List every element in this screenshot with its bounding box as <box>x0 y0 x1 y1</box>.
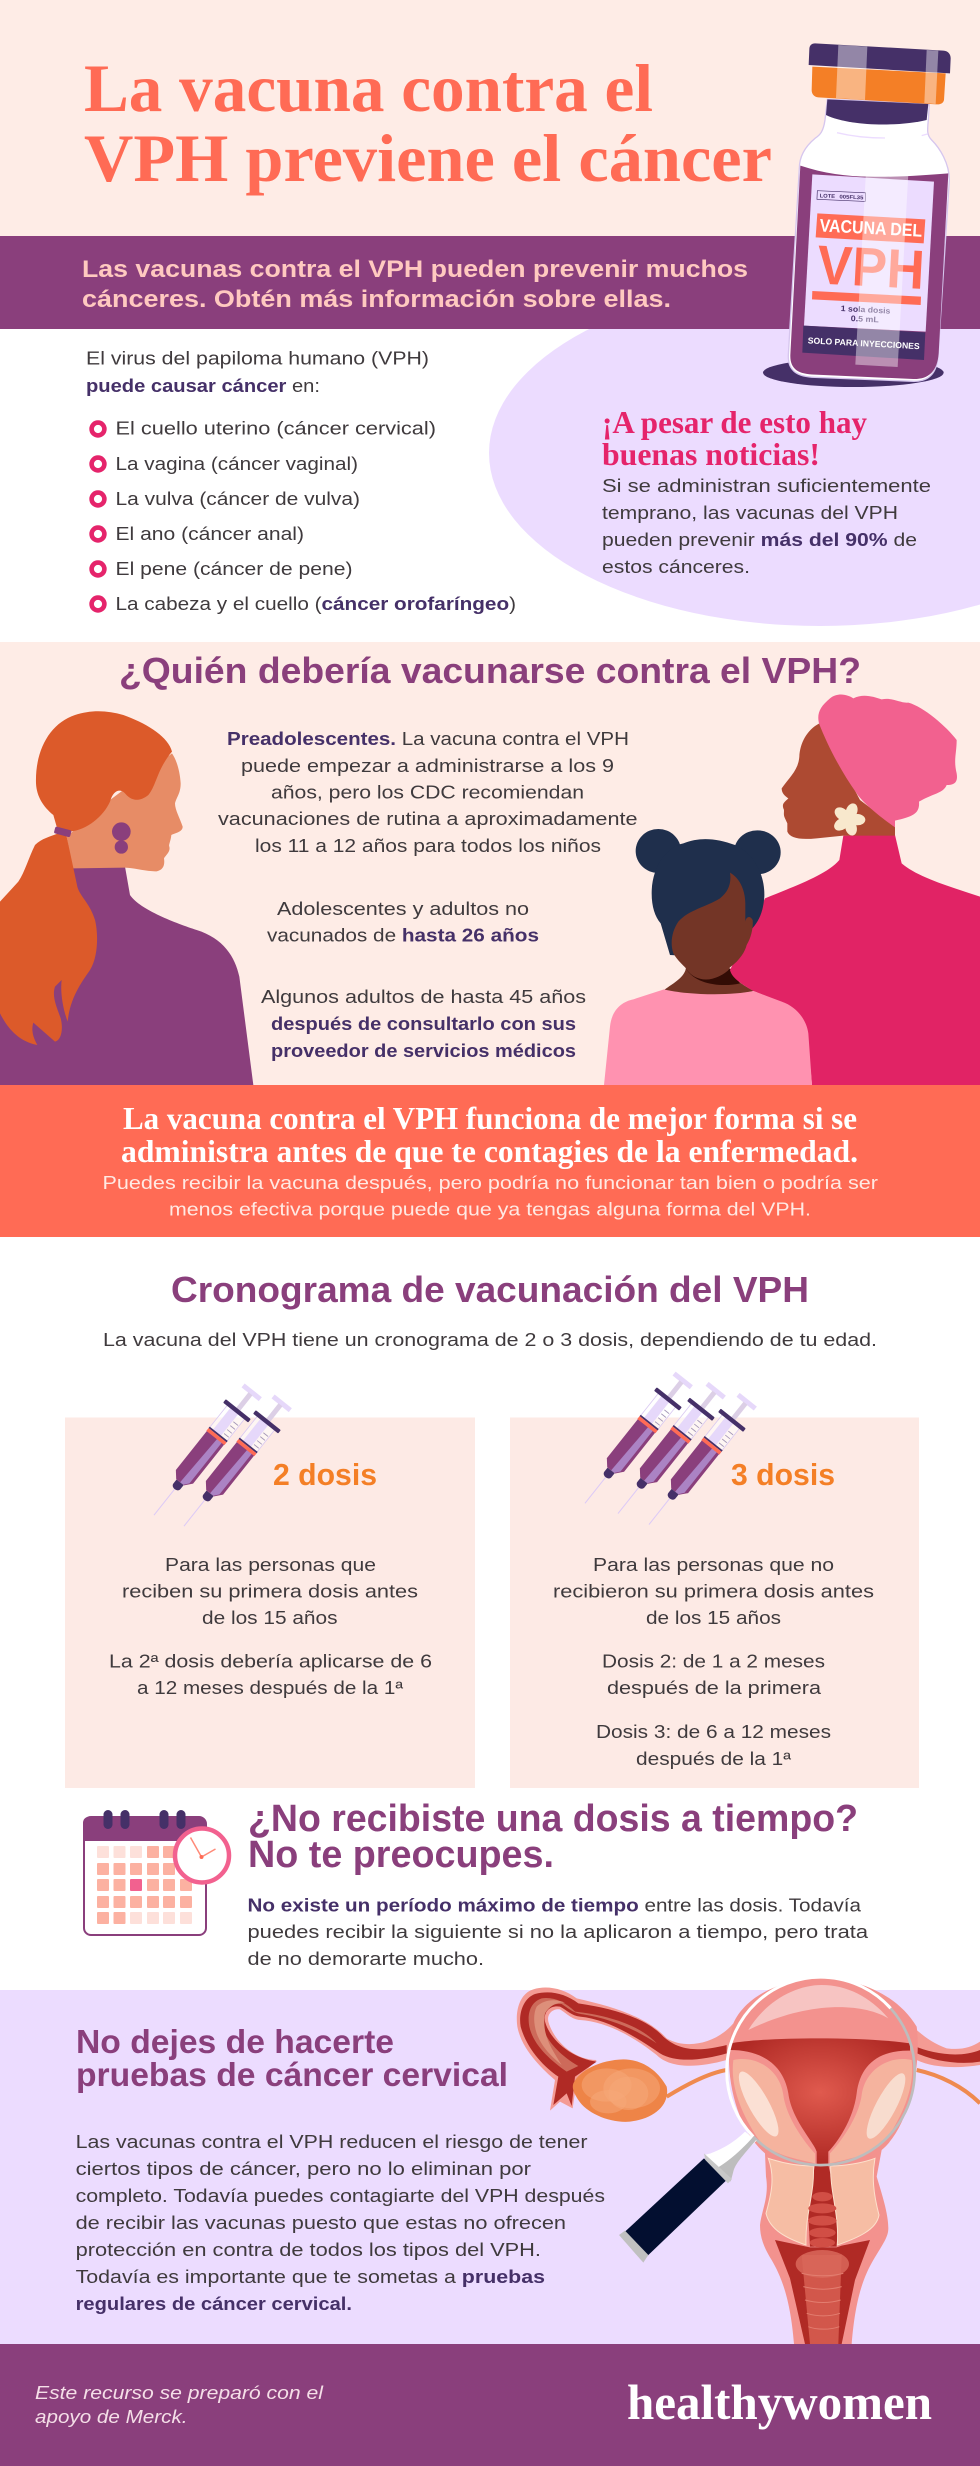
icon: vaccine vial: LOTE <box>820 193 836 200</box>
text block: adults to 45: Algunos adultos de hasta 45 años <box>261 987 586 1007</box>
text block: 2 doses: a 12 meses después de la 1ª <box>137 1678 403 1698</box>
text block: preteens: puede empezar a administrarse a los 9 <box>241 756 614 776</box>
text block: adults to 45: después de consultarlo con sus <box>271 1014 576 1034</box>
text block: works best: Puedes recibir la vacuna después, pero podría no funcionar tan bien o podría ser <box>102 1173 878 1193</box>
text block: 2 doses <box>109 1555 432 1698</box>
panel: coral band <box>0 1085 980 1237</box>
text block: teens and adults: vacunados de hasta 26 años <box>267 926 539 946</box>
intro band text: cánceres. Obtén más información sobre ellas. <box>82 286 671 313</box>
text block: 3 doses: después de la 1ª <box>636 1749 791 1769</box>
text block: missed dose: No existe un período máximo de tiempo entre las dosis. Todavía <box>248 1896 862 1916</box>
text block: screening: protección en contra de todos los tipos del VPH. <box>76 2240 541 2260</box>
text block: preteens: años, pero los CDC recomiendan <box>271 782 584 802</box>
callout: good news: estos cánceres. <box>602 557 750 577</box>
text block: preteens: vacunaciones de rutina a aproximadamente <box>218 809 638 829</box>
panel: purple intro band <box>0 236 980 329</box>
text block: 3 doses <box>553 1555 874 1769</box>
text block: 3 doses: Dosis 3: de 6 a 12 meses <box>596 1722 831 1742</box>
list: cancers: El cuello uterino (cáncer cervical) <box>116 419 436 439</box>
text block: virus causes cancer <box>86 348 429 396</box>
heading: missed dose: ¿No recibiste una dosis a tiempo? <box>248 1798 858 1840</box>
icon: vaccine vial <box>763 43 951 387</box>
illustration: uterus under magnifier <box>517 1977 980 2344</box>
text block: 2 doses: Para las personas que <box>165 1555 376 1575</box>
panel: lilac ellipse <box>489 280 980 626</box>
intro band text <box>82 256 748 313</box>
text block: missed dose: de no demorarte mucho. <box>248 1949 484 1969</box>
heading: who: ¿Quién debería vacunarse contra el VPH? <box>119 650 861 691</box>
callout: good news: temprano, las vacunas del VPH <box>602 503 898 523</box>
text block: adults to 45 <box>261 987 586 1061</box>
icon: vaccine vial: VPH <box>816 233 926 301</box>
text block: screening: de recibir las vacunas puesto que estas no ofrecen <box>76 2213 566 2233</box>
text block: 2 doses: reciben su primera dosis antes <box>122 1582 418 1602</box>
callout: good news <box>602 404 931 577</box>
icon: two syringes <box>141 1380 296 1536</box>
text block: sponsor note <box>35 2383 324 2427</box>
text block: 3 doses: Dosis 2: de 1 a 2 meses <box>602 1652 825 1672</box>
text block: screening: regulares de cáncer cervical. <box>76 2294 352 2314</box>
panel: who should get vaccinated <box>0 642 980 1086</box>
text block: sponsor note: apoyo de Merck. <box>35 2407 188 2427</box>
list: cancers: La cabeza y el cuello ( cáncer orofaríngeo ) <box>116 594 516 614</box>
list: cancers: El ano (cáncer anal) <box>116 524 304 544</box>
heading: screening: No dejes de hacerte <box>76 2023 394 2060</box>
callout: good news: Si se administran suficientemente <box>602 476 931 496</box>
heading: missed dose: No te preocupes. <box>248 1834 554 1876</box>
illustration: woman with ponytail <box>0 711 253 1085</box>
title: VPH previene el cáncer <box>84 120 772 196</box>
list: cancers: El pene (cáncer de pene) <box>116 559 352 579</box>
heading: schedule: Cronograma de vacunación del VPH <box>171 1269 809 1310</box>
callout: good news: ¡A pesar de esto hay <box>602 404 867 440</box>
text block: 3 doses: después de la primera <box>607 1678 822 1698</box>
logo: healthywomen: healthywomen <box>627 2374 932 2430</box>
text block: screening: completo. Todavía puedes contagiarte del VPH después <box>76 2186 605 2206</box>
text block: screening <box>76 2132 605 2314</box>
icon: vaccine vial: 005FL35 <box>839 194 864 201</box>
text block: teens and adults: Adolescentes y adultos no <box>277 899 529 919</box>
label: 2 dosis: 2 dosis <box>273 1457 377 1492</box>
title: La vacuna contra el <box>84 50 653 126</box>
callout: good news: pueden prevenir más del 90% de <box>602 530 917 550</box>
intro band text: Las vacunas contra el VPH pueden prevenir muchos <box>82 256 748 283</box>
text block: 2 doses: de los 15 años <box>202 1608 338 1628</box>
text block: screening: Las vacunas contra el VPH reducen el riesgo de tener <box>76 2132 587 2152</box>
list: cancers: La vagina (cáncer vaginal) <box>116 454 358 474</box>
panel: footer <box>0 2344 980 2466</box>
icon: vaccine vial: VACUNA DEL <box>819 215 923 241</box>
text block: works best <box>102 1100 878 1220</box>
text block: preteens <box>218 729 638 856</box>
text block: works best: La vacuna contra el VPH funciona de mejor forma si se <box>123 1100 857 1136</box>
text block: sponsor note: Este recurso se preparó con el <box>35 2383 324 2403</box>
text block: works best: menos efectiva porque puede que ya tengas alguna forma del VPH. <box>169 1200 811 1220</box>
text block: 3 doses: Para las personas que no <box>593 1555 834 1575</box>
text block: virus causes cancer: El virus del papiloma humano (VPH) <box>86 348 429 368</box>
text block: 3 doses: recibieron su primera dosis antes <box>553 1582 874 1602</box>
heading: screening <box>76 2023 508 2093</box>
title <box>84 50 772 196</box>
icon: calendar with clock <box>83 1810 229 1935</box>
text block: 2 doses: La 2ª dosis debería aplicarse de 6 <box>109 1652 432 1672</box>
panel: cervical screening <box>0 1990 980 2344</box>
text block: 3 doses: de los 15 años <box>646 1608 781 1628</box>
icon: vaccine vial: 1 sola dosis <box>841 304 891 316</box>
illustration: woman with turban and girl with buns <box>604 694 980 1085</box>
text block: preteens: Preadolescentes. La vacuna contra el VPH <box>227 729 629 749</box>
text block: screening: ciertos tipos de cáncer, pero no lo eliminan por <box>76 2159 531 2179</box>
heading: missed dose <box>248 1798 858 1876</box>
heading: screening: pruebas de cáncer cervical <box>76 2056 508 2093</box>
text block: virus causes cancer: puede causar cáncer en: <box>86 376 320 396</box>
text block: schedule intro: La vacuna del VPH tiene un cronograma de 2 o 3 dosis, dependiendo de tu edad. <box>103 1330 877 1350</box>
panel: 3 doses <box>510 1418 919 1788</box>
panel: 2 doses <box>65 1418 475 1788</box>
text block: works best: administra antes de que te contagies de la enfermedad. <box>121 1133 858 1169</box>
text block: preteens: los 11 a 12 años para todos los niños <box>255 836 601 856</box>
text block: screening: Todavía es importante que te sometas a pruebas <box>76 2267 545 2287</box>
panel: header background <box>0 0 980 236</box>
text block: missed dose: puedes recibir la siguiente si no la aplicaron a tiempo, pero trata <box>248 1922 869 1942</box>
text block: teens and adults <box>267 899 539 946</box>
icon: three syringes <box>572 1368 761 1535</box>
callout: good news: buenas noticias! <box>602 436 820 472</box>
icon: vaccine vial: 0.5 mL <box>851 314 879 324</box>
list: cancers <box>92 419 516 614</box>
icon: vaccine vial: SOLO PARA INYECCIONES <box>808 335 920 351</box>
text block: missed dose <box>248 1896 869 1969</box>
label: 3 dosis: 3 dosis <box>731 1457 835 1492</box>
list: cancers: La vulva (cáncer de vulva) <box>116 489 360 509</box>
text block: adults to 45: proveedor de servicios médicos <box>271 1041 576 1061</box>
